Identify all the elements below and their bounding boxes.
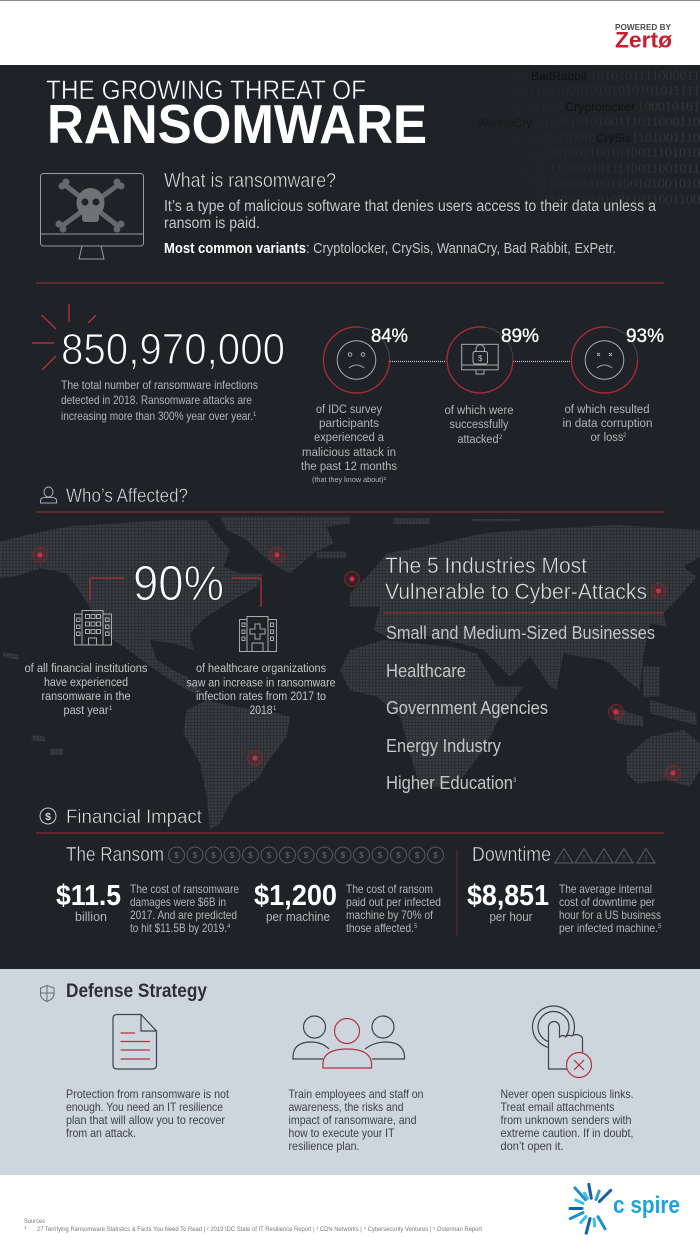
icon row: dollar coins: $ (248, 851, 253, 860)
icon row: warning triangles: ! (623, 854, 625, 863)
big stat: total infections: increasing more than 300% year over year. (61, 409, 253, 423)
connector dotted lines (390, 360, 571, 362)
icon: dead face (585, 341, 624, 379)
stat: 1,200 per machine: paid out per infected (346, 895, 441, 909)
industry list: Energy Industry (386, 735, 502, 756)
icon: red burst rays (32, 304, 96, 370)
icon: person (40, 487, 56, 503)
text column 2 (288, 1087, 424, 1153)
binary code backdrop: 01011010101011100001011110011001011 (459, 162, 700, 177)
malware names: WannaCry (477, 116, 532, 130)
binary code backdrop: 0101010101010101011010101111000011 (465, 69, 700, 84)
icon: bank building (74, 610, 112, 645)
stat: 93 percent: or loss (590, 430, 624, 444)
stat: 84 percent: (that they know about)² (312, 477, 387, 484)
text column 3: extreme caution. If in doubt, (500, 1126, 634, 1140)
text: healthcare organizations: 2018 (250, 703, 273, 717)
stat: 8,851 per hour: per hour (490, 909, 533, 924)
malware names: CrySis (596, 131, 631, 145)
malware names: BadRabbit (531, 69, 588, 83)
icon row: warning triangles: ! (645, 854, 647, 863)
logo: c spire: c spire (613, 1192, 680, 1219)
icon row: dollar coins: $ (322, 851, 327, 860)
text column 2: awareness, the risks and (288, 1100, 404, 1114)
map location pins (32, 548, 680, 780)
stat: 90 percent with brackets: 90% (133, 557, 224, 611)
stat: 11.5 billion: 4 (227, 924, 231, 930)
industry list: 3 (513, 778, 517, 784)
logo: powered by Zerto: Zertø (615, 28, 673, 52)
footer sources: 27 Terrifying Ransomware Statistics & Facts You Need To Read | ² 2019 IDC State of IT Resilience Report | ³ CDN Networks | ⁴ Cybersecurity Ventures | ⁵ Osterman Report (37, 1226, 482, 1233)
panel: defense strategy (0, 969, 700, 1175)
text column 2: Train employees and staff on (288, 1087, 424, 1101)
industry list: Small and Medium-Sized Businesses (386, 622, 655, 643)
icon row: warning triangles: ! (583, 854, 585, 863)
logo: powered by Zerto: POWERED BY (615, 22, 671, 32)
logo: c spire (570, 1184, 680, 1233)
dark background panel (0, 65, 700, 969)
stat: 1,200 per machine: those affected. (346, 921, 414, 935)
text: healthcare organizations: infection rates from 2017 to (196, 689, 326, 703)
text: financial institutions: past year (64, 703, 108, 717)
intro text: what is ransomware: : Cryptolocker, CrySis, WannaCry, Bad Rabbit, ExPetr. (306, 240, 616, 257)
text: financial institutions: have experienced (44, 675, 128, 689)
stat: 84 percent: participants (319, 416, 379, 430)
stat: 93 percent: in data corruption (562, 416, 653, 430)
intro text: what is ransomware: Most common variants (164, 240, 306, 257)
icon row: dollar coins: $ (415, 851, 420, 860)
icon row: warning triangles (555, 848, 655, 863)
icon: document (113, 1014, 156, 1069)
stat: 11.5 billion: 2017. And are predicted (130, 908, 237, 922)
panel: five vulnerable industries (384, 553, 664, 793)
industry list (386, 622, 655, 793)
stat: 84 percent: 84% (371, 325, 408, 347)
intro text: what is ransomware (164, 170, 656, 257)
text column 3: don’t open it. (500, 1139, 564, 1153)
big stat: total infections: 1 (253, 412, 257, 418)
text column 1 (66, 1087, 230, 1140)
stat: 93 percent: 2 (623, 433, 627, 439)
stat: 11.5 billion: billion (75, 909, 107, 924)
stat: 93 percent (562, 325, 664, 444)
text: financial institutions: 1 (109, 706, 113, 712)
text column 1: enough. You need an IT resilience (66, 1100, 223, 1114)
text: financial institutions: of all financial institutions (24, 661, 148, 675)
icon row: warning triangles: ! (603, 854, 605, 863)
big stat: total infections: 850,970,000 (61, 325, 285, 374)
icon: dollar coin: $ (45, 811, 51, 823)
binary code backdrop: 01010010101101100010101010101011111 (458, 84, 700, 99)
intro text: what is ransomware: What is ransomware? (164, 170, 336, 192)
stat: 90 percent with brackets (90, 557, 261, 611)
icon row: dollar coins: $ (267, 851, 272, 860)
icon: locked computer: $ (478, 354, 483, 363)
stat: 89 percent: 2 (499, 435, 503, 441)
icon row: dollar coins: $ (304, 851, 309, 860)
heading: Vulnerable to Cyber-Attacks (385, 579, 647, 604)
stat: 8,851 per hour: The average internal (559, 882, 652, 896)
icon row: dollar coins: $ (359, 851, 364, 860)
stat: 11.5 billion (56, 880, 239, 935)
stat: 84 percent: the past 12 months (301, 459, 397, 473)
stat: 89 percent: 89% (501, 325, 539, 347)
stat: 11.5 billion: to hit $11.5B by 2019. (130, 921, 227, 935)
text column 2: how to execute your IT (288, 1126, 394, 1140)
stat: 8,851 per hour (467, 880, 662, 935)
stat: 84 percent: malicious attack in (302, 445, 396, 459)
big stat: total infections: The total number of ransomware infections (61, 378, 258, 392)
heading: The 5 Industries Most (385, 553, 588, 578)
stat: 1,200 per machine: 5 (414, 924, 418, 930)
stat: 8,851 per hour: hour for a US business (559, 908, 661, 922)
binary code backdrop: 01101010011011001000101010100010101 (457, 100, 700, 115)
section heading: financial impact (36, 806, 664, 833)
stat: 84 percent: experienced a (314, 430, 384, 444)
icon row: warning triangles: ! (563, 854, 565, 863)
title: THE GROWING THREAT OF (46, 75, 366, 105)
world map dotted background (0, 513, 700, 833)
stat: 11.5 billion: The cost of ransomware (130, 882, 239, 896)
text column 2: resilience plan. (288, 1139, 360, 1153)
big stat: total infections (61, 325, 285, 423)
text column 2: impact of ransomware, and (288, 1113, 416, 1127)
malware names (476, 69, 636, 145)
industry list: Higher Education (386, 772, 513, 793)
stat: 11.5 billion: damages were $6B in (130, 895, 226, 909)
stat: 93 percent: of which resulted (564, 402, 650, 416)
text column 3 (500, 1087, 634, 1153)
stat: 1,200 per machine: machine by 70% of (346, 908, 434, 922)
text column 3: Never open suspicious links. (500, 1087, 634, 1101)
text: financial institutions: ransomware in the (42, 689, 131, 703)
icon row: dollar coins: $ (285, 851, 290, 860)
footer sources (24, 1218, 482, 1233)
text column 1: plan that will allow you to recover (66, 1113, 225, 1127)
icon row: dollar coins: $ (341, 851, 346, 860)
stat: 1,200 per machine: The cost of ransom (346, 882, 433, 896)
icon row: dollar coins: $ (230, 851, 235, 860)
icon: hand pressing link (532, 1006, 592, 1078)
stat: 8,851 per hour: 5 (658, 924, 662, 930)
section heading: who's affected: Who’s Affected? (66, 485, 188, 507)
text: financial institutions (24, 661, 148, 717)
industry list: Government Agencies (386, 697, 548, 718)
icon row: dollar coins: $ (211, 851, 216, 860)
industry list: Healthcare (386, 660, 466, 681)
stat: 84 percent: of IDC survey (316, 402, 383, 416)
big stat: total infections: detected in 2018. Ransomware attacks are (61, 393, 252, 407)
binary code backdrop: 01001010110100110001100111101001110 (459, 131, 700, 146)
icon: monitor with skull and crossbones (40, 174, 144, 259)
icon: three people (293, 1016, 404, 1068)
section heading: who's affected (36, 485, 664, 512)
intro text: what is ransomware: It’s a type of malicious software that denies users access to their data unless a (164, 198, 656, 215)
stat: 11.5 billion: $11.5 (56, 880, 121, 912)
stat: 1,200 per machine: per machine (266, 909, 330, 924)
text: healthcare organizations: of healthcare organizations (196, 661, 326, 675)
binary code backdrop: 00101011010101001010100111011000110 (458, 115, 700, 130)
text: healthcare organizations: saw an increase in ransomware (186, 676, 336, 690)
footer sources: Sources (24, 1218, 46, 1225)
text: healthcare organizations: 1 (273, 706, 277, 712)
intro text: what is ransomware: ransom is paid. (164, 215, 260, 232)
heading with shield icon: Defense Strategy (66, 980, 207, 1002)
icon row: dollar coins (168, 847, 444, 863)
text column 1: from an attack. (66, 1126, 136, 1140)
icon row: dollar coins: $ (193, 851, 198, 860)
stat: 89 percent (444, 325, 539, 446)
header band (0, 0, 700, 65)
text column 3: Treat email attachments (500, 1100, 615, 1114)
stat: 1,200 per machine: $1,200 (254, 880, 337, 912)
heading: downtime: Downtime (472, 844, 551, 866)
footer sources: 1 (24, 1225, 27, 1230)
icon row: dollar coins: $ (174, 851, 179, 860)
text: healthcare organizations (186, 661, 336, 717)
icon row: dollar coins: $ (378, 851, 383, 860)
stat: 89 percent: of which were (444, 403, 514, 417)
binary code backdrop: 00101001010111000011001100101001010 (457, 177, 700, 192)
section heading: financial impact: Financial Impact (66, 806, 203, 828)
binary code backdrop (457, 69, 700, 208)
stat: 89 percent: attacked (458, 432, 499, 446)
malware names: Cryptolocker (565, 100, 635, 114)
title: RANSOMWARE (47, 93, 427, 155)
heading (385, 553, 647, 604)
icon row: dollar coins: $ (433, 851, 438, 860)
stat: 93 percent: 93% (626, 325, 664, 347)
icon: sad face (337, 341, 376, 379)
text column 1: Protection from ransomware is not (66, 1087, 230, 1101)
icon row: dollar coins: $ (396, 851, 401, 860)
icon: hospital (240, 616, 276, 652)
stat: 8,851 per hour: cost of downtime per (559, 895, 655, 909)
binary code backdrop: 10100110101100110101010011011001100 (458, 193, 700, 208)
binary code backdrop: 10110000101010010011001010011101010 (457, 146, 700, 161)
stat: 84 percent (301, 325, 408, 484)
stat: 8,851 per hour: per infected machine. (559, 921, 658, 935)
stat: 89 percent: successfully (450, 417, 509, 431)
stat: 8,851 per hour: $8,851 (467, 880, 549, 912)
icon: dollar coin (40, 808, 56, 824)
heading: the ransom: The Ransom (66, 844, 164, 866)
stat: 1,200 per machine (254, 880, 441, 935)
text column 3: from unknown senders with (500, 1113, 632, 1127)
